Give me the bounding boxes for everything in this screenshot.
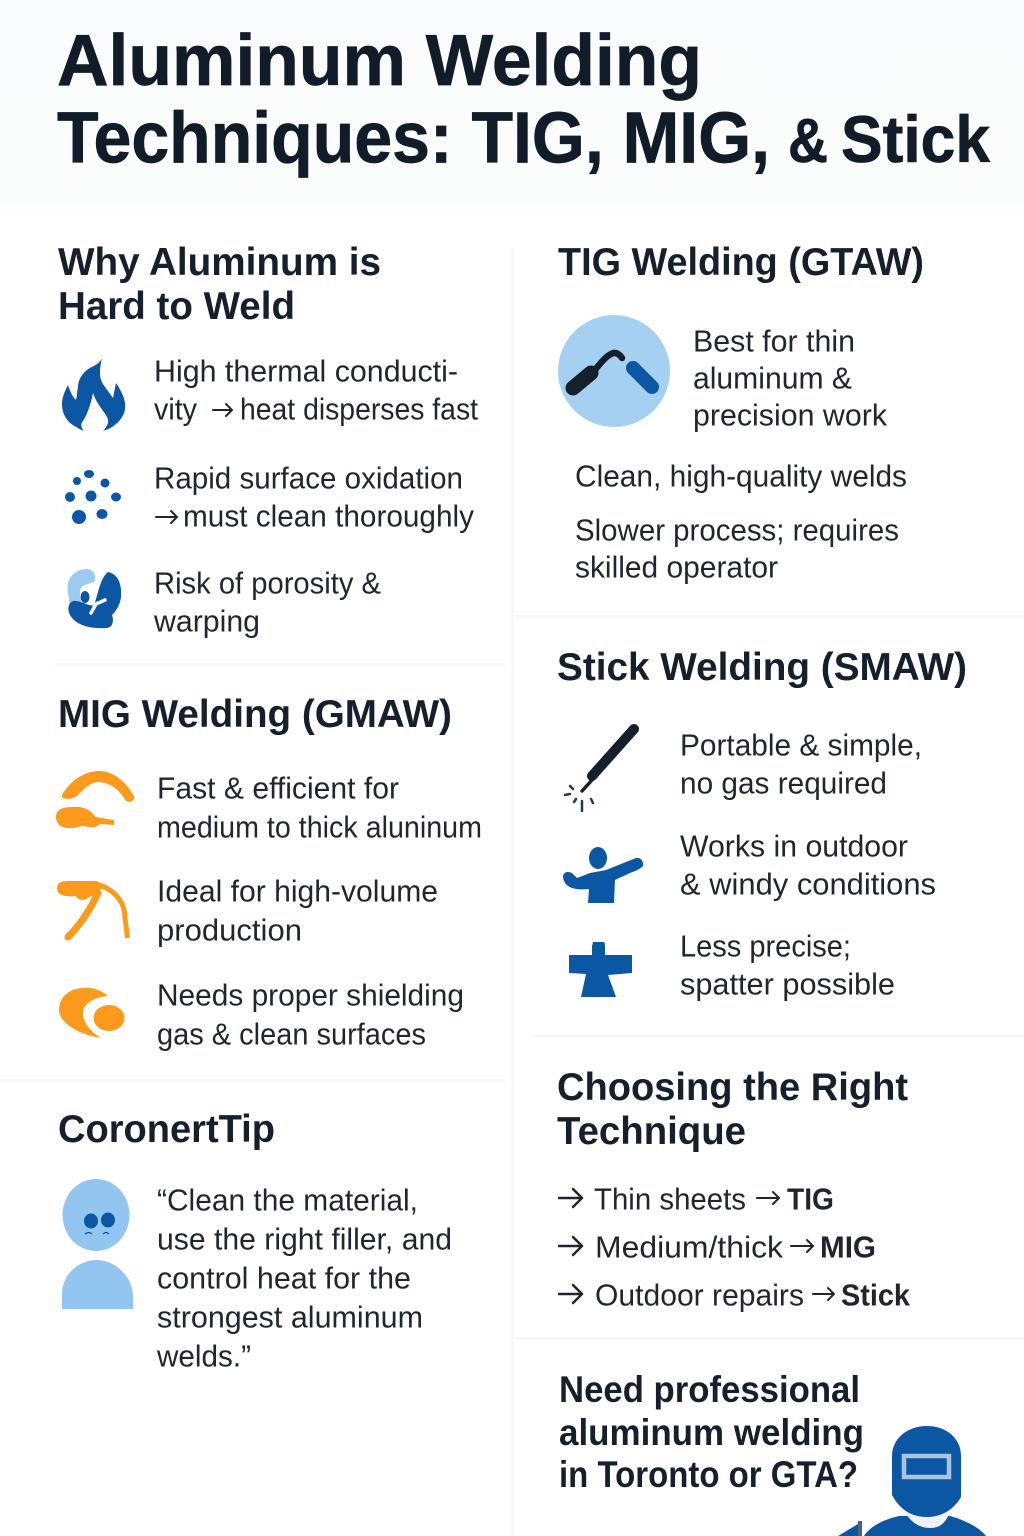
- quote: control heat for the: [157, 1260, 411, 1296]
- text: slower process: skilled operator: [575, 550, 778, 584]
- text: surface oxidation: must clean thoroughly: [183, 498, 474, 534]
- list: outdoor repairs: [559, 1278, 911, 1312]
- heading: need professional: in Toronto or GTA?: [559, 1454, 858, 1495]
- list: thin sheets: TIG: [787, 1182, 834, 1216]
- text: thermal conductivity: heat disperses fast: [240, 392, 478, 426]
- list: medium thick: Medium/thick: [595, 1230, 784, 1264]
- text: less precise: Less precise;: [680, 928, 851, 964]
- icon: MIG gun: [57, 881, 128, 938]
- text: fast and efficient: [157, 770, 482, 844]
- text: best for thin: [693, 324, 887, 432]
- title: [57, 21, 990, 178]
- text: porosity: warping: [153, 604, 260, 638]
- text: surface oxidation: Rapid surface oxidation: [154, 460, 463, 496]
- text: porosity: Risk of porosity &: [154, 566, 381, 600]
- list: medium thick: [559, 1230, 876, 1264]
- heading: choosing: [557, 1066, 908, 1153]
- text: high volume: Ideal for high-volume: [157, 874, 438, 908]
- text: slower process: [575, 512, 899, 584]
- heading: why aluminum: Why Aluminum is: [58, 241, 381, 284]
- heading: why aluminum: [58, 241, 381, 328]
- heading: stick: Stick Welding (SMAW): [557, 646, 967, 689]
- quote: welds.”: [156, 1338, 251, 1374]
- text: clean welds: Clean, high-quality welds: [575, 458, 907, 494]
- title: Techniques: TIG, MIG,: [57, 98, 770, 178]
- icon: oxidation dots: [65, 470, 121, 524]
- text: thermal conductivity: High thermal conducti-: [154, 354, 458, 388]
- icon: MIG arc and torch: [56, 771, 134, 828]
- icon: shielding gas: [59, 988, 124, 1038]
- heading: why aluminum: Hard to Weld: [58, 285, 295, 328]
- text: portable: no gas required: [680, 766, 887, 800]
- panel: expert tip: [58, 1108, 452, 1374]
- icon: TIG torch: [558, 315, 670, 427]
- quote: strongest aluminum: [157, 1300, 423, 1334]
- heading: choosing: Choosing the Right: [557, 1066, 908, 1109]
- text: high volume: production: [157, 912, 302, 948]
- heading: TIG: TIG Welding (GTAW): [558, 241, 924, 284]
- text: thermal conductivity: vity: [154, 392, 197, 426]
- icon: outdoor worker: [563, 847, 643, 903]
- heading: need professional: [559, 1369, 864, 1495]
- panel: TIG welding: [558, 241, 924, 584]
- title: &: [788, 107, 828, 176]
- text: outdoor: [680, 828, 936, 902]
- list: medium thick: MIG: [820, 1230, 876, 1264]
- panel: call to action: [559, 1369, 986, 1536]
- panel: stick welding: [557, 646, 967, 1002]
- text: best for thin: aluminum &: [693, 360, 852, 396]
- list: thin sheets: [559, 1182, 834, 1216]
- list: thin sheets: Thin sheets: [594, 1182, 746, 1216]
- text: fast and efficient: Fast & efficient for: [157, 770, 399, 806]
- text: less precise: spatter possible: [680, 966, 895, 1002]
- text: porosity: [153, 566, 381, 638]
- text: best for thin: Best for thin: [693, 324, 855, 358]
- heading: MIG: MIG Welding (GMAW): [58, 693, 452, 736]
- title: Aluminum Welding: [57, 21, 702, 101]
- text: outdoor: Works in outdoor: [680, 828, 908, 864]
- quote: [156, 1182, 452, 1374]
- text: less precise: [680, 928, 895, 1002]
- text: shielding gas: Needs proper shielding: [157, 978, 464, 1012]
- panel: MIG welding: [56, 693, 482, 1052]
- heading: tip: CoronertTip: [58, 1108, 275, 1151]
- list: outdoor repairs: Stick: [841, 1278, 911, 1312]
- text: surface oxidation: [154, 460, 474, 534]
- quote: “Clean the material,: [157, 1182, 418, 1218]
- heading: need professional: Need professional: [559, 1369, 860, 1410]
- text: shielding gas: [157, 978, 464, 1052]
- icon: welder in helmet: [838, 1426, 986, 1536]
- text: shielding gas: gas & clean surfaces: [157, 1016, 426, 1052]
- panel: choosing the right technique: [557, 1066, 911, 1312]
- heading: choosing: Technique: [557, 1110, 746, 1153]
- icon: porosity and warping: [67, 569, 121, 628]
- text: fast and efficient: medium to thick aluninum: [157, 810, 482, 844]
- heading: need professional: aluminum welding: [559, 1412, 864, 1453]
- list: outdoor repairs: Outdoor repairs: [595, 1278, 804, 1312]
- icon: flame: [62, 358, 125, 431]
- text: portable: Portable & simple,: [680, 728, 922, 762]
- text: thermal conductivity: [154, 354, 478, 426]
- quote: use the right filler, and: [157, 1222, 452, 1256]
- text: best for thin: precision work: [693, 398, 887, 432]
- text: slower process: Slower process; requires: [575, 512, 899, 548]
- panel: why aluminum is hard to weld: [58, 241, 478, 638]
- icon: spatter cross: [569, 942, 632, 997]
- text: portable: [680, 728, 922, 800]
- icon: electrode: [565, 729, 634, 811]
- text: outdoor: & windy conditions: [680, 866, 936, 902]
- icon: person: [62, 1179, 133, 1309]
- text: high volume: [157, 874, 438, 948]
- title: Stick: [841, 102, 990, 176]
